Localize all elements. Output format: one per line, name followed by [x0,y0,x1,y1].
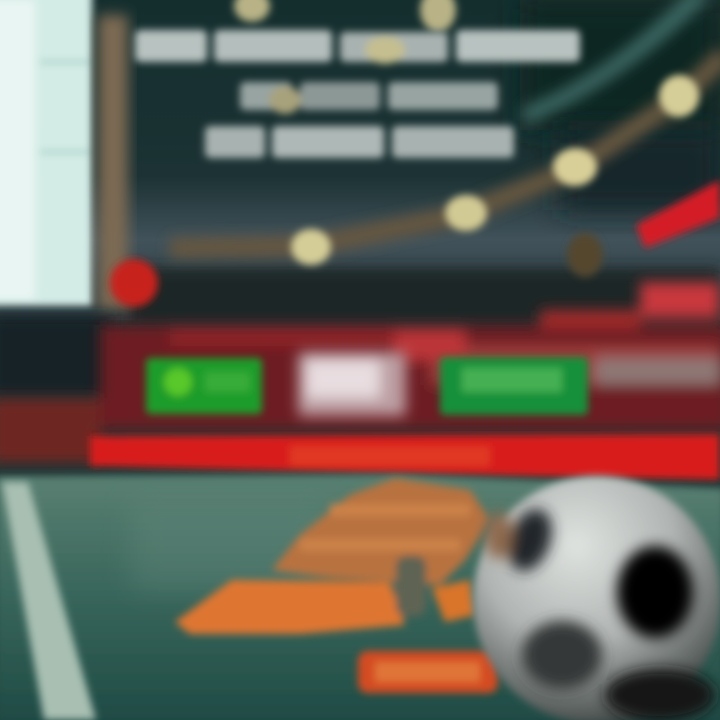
tan column [98,15,128,310]
orange button [358,651,498,693]
spotlights [234,0,699,277]
window panel [0,0,92,306]
stat box: left green [146,358,262,414]
red banner [90,434,720,480]
red stands [0,282,720,463]
red sign upper right [636,180,720,248]
dark lower left stand [0,316,115,396]
lighting truss [170,0,720,277]
pitch [0,474,720,720]
title text block [135,30,580,158]
background upper stadium [0,0,720,326]
white pitch line [2,482,96,720]
stat box: centre white [298,352,406,416]
icon: soccer ball [473,476,720,720]
orange map shape [175,478,490,634]
red circle badge [110,259,158,307]
stat box: right green [440,357,588,415]
